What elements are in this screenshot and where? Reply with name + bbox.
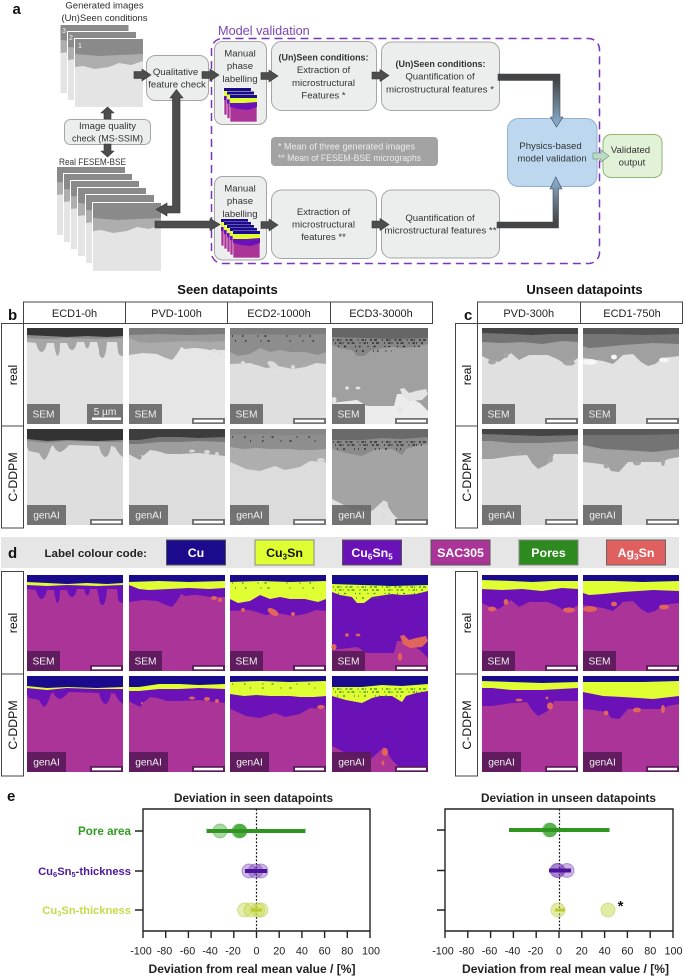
legend band: label colour code: Sn [287, 546, 303, 560]
row labels [456, 324, 478, 528]
box: validated output: Validated [611, 145, 650, 156]
legend band: label colour code: Sn [372, 546, 388, 560]
panel letter c: c [464, 307, 472, 324]
row labels left: real [6, 613, 20, 633]
image stack: generated images: 2 [69, 35, 73, 42]
x axis tick labels: -40 [202, 946, 218, 958]
label map: ECD3-3000h generated: genAI [338, 758, 365, 768]
box: physics-based model validation [508, 118, 597, 186]
micrograph: PVD-300h real: SEM [487, 410, 510, 420]
chart: deviation in seen datapoints [38, 793, 380, 976]
zero reference line [558, 809, 560, 931]
legend band: label colour code: Ag [618, 546, 634, 560]
column headers: PVD-100h [151, 308, 202, 320]
box: manual phase labelling bottom: Manual [224, 184, 256, 195]
label map: ECD2-1000h real [230, 575, 326, 671]
arrow: manual to extraction top [261, 70, 278, 82]
label map: PVD-100h real [129, 575, 225, 671]
legend band: label colour code: Cu [188, 546, 204, 560]
series: Cu3Sn thickness [551, 903, 615, 917]
row labels: C-DDPM [460, 452, 474, 502]
label map: PVD-100h generated [129, 676, 225, 772]
series: Cu6Sn5 thickness [549, 864, 574, 878]
micrograph: ECD1-750h real [583, 328, 679, 424]
micrograph: PVD-100h real: SEM [134, 410, 157, 420]
column headers: ECD1-750h [603, 308, 661, 320]
box: quantification bottom: microstructural features ** [384, 226, 497, 236]
legend band: label colour code: Cu [351, 546, 368, 560]
x axis tick labels: 80 [341, 946, 353, 958]
box: manual phase labelling top: Manual [224, 48, 256, 60]
micrograph: ECD1-750h real: SEM [588, 410, 611, 420]
label map: ECD1-750h generated [583, 676, 679, 772]
x axis tick labels: 20 [576, 946, 588, 958]
box: manual phase labelling top: phase [227, 61, 253, 72]
box: image quality check [64, 120, 150, 144]
legend band: label colour code: 6 [368, 552, 373, 562]
label map: ECD3-3000h real: SEM [337, 656, 360, 668]
heading: generated images: (Un)Seen conditions [61, 13, 148, 24]
x axis tick labels: -40 [505, 946, 520, 958]
label map: PVD-300h generated: genAI [488, 758, 515, 768]
x axis tick labels: 60 [319, 946, 331, 958]
plot frame and ticks [437, 809, 673, 938]
legend band: label colour code: SAC305 [437, 546, 484, 560]
x axis tick labels: -60 [482, 946, 497, 958]
row labels: C-DDPM [6, 452, 20, 502]
panel letter b: b [8, 307, 17, 324]
box: extraction bottom [272, 190, 376, 258]
zero reference line [256, 809, 258, 931]
column headers [24, 302, 432, 324]
column headers: ECD3-3000h [349, 308, 413, 320]
box: extraction top: Features * [301, 90, 346, 102]
x axis tick labels: -80 [459, 946, 474, 958]
micrograph: PVD-300h real [482, 328, 578, 424]
box: quantification top: microstructural features * [386, 84, 494, 95]
note: mean definitions [271, 137, 438, 166]
micrograph: PVD-100h generated: genAI [135, 510, 162, 522]
box: quantification top: (Un)Seen conditions: [396, 59, 486, 70]
micrograph: ECD2-1000h real: SEM [235, 410, 258, 420]
box: validated output: output [619, 158, 646, 168]
row labels [2, 324, 24, 528]
micrograph: ECD1-750h generated [583, 429, 679, 525]
x axis tick labels: -100 [130, 946, 152, 958]
x axis tick labels: -20 [528, 946, 543, 958]
note: mean definitions: * Mean of three generated images [278, 141, 415, 151]
legend band: label colour code: Sn [639, 546, 654, 560]
box: extraction top: (Un)Seen conditions: [278, 52, 368, 64]
label map: ECD3-3000h generated [332, 676, 428, 772]
series: Cu3Sn thickness [238, 903, 268, 917]
note: mean definitions: ** Mean of FESEM-BSE micrographs [278, 153, 421, 163]
arrow: extraction to quantification top [372, 70, 389, 82]
x axis tick labels: 40 [296, 946, 308, 958]
column headers: ECD1-0h [52, 308, 97, 320]
micrograph: ECD3-3000h real: SEM [337, 410, 360, 420]
x axis tick labels: 80 [644, 946, 656, 958]
x axis tick labels: -100 [432, 946, 454, 958]
x axis title: Deviation from real mean value / [%] [462, 964, 669, 976]
chart: deviation in unseen datapoints [432, 793, 683, 976]
column headers: ECD2-1000h [247, 308, 311, 320]
box: quantification top: Quantification of [405, 72, 475, 83]
label map: PVD-100h generated: genAI [135, 758, 162, 768]
row label: Cu3Sn thickness: 3 [57, 909, 61, 918]
micrograph: ECD1-750h generated: genAI [589, 510, 616, 522]
box: image quality check: check (MS-SSIM) [72, 134, 143, 144]
arrow: generated to qualitative [134, 69, 151, 81]
label map: ECD1-0h real: SEM [32, 656, 55, 668]
row label: pore area: Pore area [78, 826, 132, 838]
x axis tick labels: 20 [273, 946, 285, 958]
arrow: to validated output [593, 150, 609, 162]
micrograph: PVD-300h generated [482, 429, 578, 525]
box: physics-based model validation: Physics-based [519, 141, 582, 152]
row labels right: C-DDPM [460, 700, 474, 750]
box: quantification top [382, 42, 500, 110]
x axis tick labels: 100 [664, 946, 683, 958]
label map: ECD1-750h real: SEM [588, 656, 611, 668]
arrow: manual to extraction bottom [261, 219, 278, 231]
box: qualitative feature check: feature check [148, 80, 206, 90]
row labels right: real [460, 613, 474, 633]
legend band: label colour code: d [8, 545, 17, 562]
panel b: seen datapoints micrographs [2, 282, 432, 528]
micrograph: ECD3-3000h generated: genAI [338, 510, 365, 522]
box: extraction bottom: Extraction of [297, 207, 350, 218]
panel letter a: a [12, 1, 22, 18]
row label: Cu6Sn5 thickness: Sn [57, 866, 72, 878]
x axis tick labels: -80 [157, 946, 172, 958]
x axis tick labels: 60 [621, 946, 633, 958]
box: quantification bottom [382, 190, 500, 258]
panel: model validation frame [212, 38, 600, 264]
row label: Cu3Sn thickness: Sn-thickness [61, 905, 131, 917]
box: manual phase labelling top [214, 42, 266, 124]
image stack: real FESEM-BSE [57, 167, 162, 272]
label map: ECD1-0h generated: genAI [33, 758, 60, 768]
legend band: label colour code: 3 [634, 552, 639, 562]
legend band: label colour code: Pores [531, 546, 566, 560]
box: extraction bottom: microstructural [292, 220, 355, 230]
x axis tick labels: 100 [362, 946, 380, 958]
x axis tick labels [432, 946, 683, 958]
series: pore area [206, 824, 306, 838]
heading: unseen datapoints: Unseen datapoints [526, 282, 643, 297]
box: manual phase labelling bottom: labelling [222, 209, 258, 220]
panel c: unseen datapoints micrographs [456, 282, 682, 528]
row label: Cu3Sn thickness: Cu [42, 905, 57, 917]
label map: PVD-300h generated [482, 676, 578, 772]
panel letter e: e [7, 788, 15, 805]
box: extraction top: microstructural [292, 78, 355, 89]
box: manual phase labelling top: labelling [222, 74, 258, 85]
row labels right [456, 572, 478, 776]
micrograph: ECD3-3000h generated [332, 429, 428, 525]
micrograph: ECD1-0h real [27, 328, 123, 424]
double arrow: real images to qualitative check [156, 90, 183, 216]
row labels: real [460, 365, 474, 385]
box: validated output [603, 134, 662, 178]
chart title: Deviation in seen datapoints [174, 793, 333, 805]
chart title: Deviation in unseen datapoints [481, 793, 656, 805]
double arrow: quality check up [101, 107, 114, 119]
micrograph: ECD3-3000h real [331, 328, 428, 424]
micrograph: ECD1-0h real: 5 µm [94, 407, 116, 418]
arrow: top branch into physics model [498, 74, 563, 127]
box: qualitative feature check: Qualitative [153, 67, 198, 78]
x axis tick labels: 0 [556, 946, 562, 958]
box: qualitative feature check [146, 56, 208, 100]
label map: PVD-300h real: SEM [487, 656, 510, 668]
heading: model validation: Model validation [218, 24, 310, 38]
arrow: real images to manual labelling [155, 218, 220, 230]
arrow: qualitative to manual labelling [202, 69, 219, 81]
heading: seen datapoints: Seen datapoints [177, 282, 278, 297]
series: pore area [509, 823, 610, 837]
micrograph: PVD-300h generated: genAI [488, 510, 515, 522]
box: quantification bottom: Quantification of [405, 213, 475, 224]
label map: ECD1-0h generated [27, 676, 123, 772]
legend band: label colour code: 3 [283, 552, 288, 562]
micrograph: ECD2-1000h generated [230, 429, 326, 525]
label map: PVD-100h real: SEM [134, 656, 157, 668]
box: manual phase labelling bottom [214, 176, 266, 260]
arrow: extraction to quantification bottom [372, 218, 389, 230]
row label: Cu6Sn5 thickness: Cu [38, 866, 53, 878]
box: image quality check: Image quality [79, 121, 136, 132]
label map: ECD2-1000h real: SEM [235, 656, 258, 668]
box: manual phase labelling bottom: phase [227, 196, 253, 207]
label map: ECD1-0h real [27, 575, 123, 671]
row labels left [2, 572, 24, 776]
micrograph: PVD-100h generated [129, 429, 225, 525]
micrograph: ECD1-0h generated: genAI [33, 510, 60, 522]
label map: ECD1-750h real [583, 575, 679, 671]
label: real FESEM-BSE: Real FESEM-BSE [59, 157, 126, 168]
micrograph: ECD2-1000h real [230, 328, 326, 424]
panel d: segmentation label maps [1, 537, 679, 776]
label map: ECD2-1000h generated: genAI [236, 758, 263, 768]
micrograph: ECD1-0h generated [27, 429, 123, 525]
micrograph: ECD1-0h real: SEM [32, 410, 55, 420]
label map: PVD-300h real [482, 575, 578, 671]
double arrow: quality check down [101, 144, 114, 157]
row labels: real [6, 365, 20, 385]
column headers: PVD-300h [503, 308, 554, 320]
image stack: generated images: 1 [78, 43, 82, 50]
legend band: label colour code: Label colour code: [44, 548, 147, 560]
column headers [478, 302, 682, 324]
legend band: label colour code [1, 537, 679, 568]
box: extraction top: Extraction of [297, 65, 350, 76]
row label: Cu6Sn5 thickness: 6 [53, 870, 57, 879]
x axis tick labels: -20 [225, 946, 241, 958]
label map: ECD1-750h generated: genAI [589, 758, 616, 768]
row label: Cu6Sn5 thickness: 5 [71, 870, 76, 879]
label map: ECD2-1000h generated [230, 676, 326, 772]
row labels left: C-DDPM [6, 700, 20, 750]
box: extraction bottom: features ** [301, 232, 346, 243]
row label: Cu6Sn5 thickness: -thickness [76, 866, 131, 878]
x axis tick labels: 0 [253, 946, 260, 958]
asterisk: outlier marker: * [618, 898, 624, 915]
x axis tick labels [130, 946, 380, 958]
arrow: bottom branch into physics model [497, 177, 562, 228]
panel e: deviation charts [7, 788, 683, 976]
panel a: workflow diagram [12, 0, 662, 272]
box: extraction top [272, 42, 376, 110]
legend band: label colour code: 5 [388, 552, 393, 562]
label map: ECD3-3000h real [331, 575, 428, 671]
image stack: generated images [60, 25, 144, 109]
x axis title: Deviation from real mean value / [%] [148, 964, 356, 976]
micrograph: PVD-100h real [129, 328, 225, 424]
series: Cu6Sn5 thickness [242, 864, 268, 878]
box: physics-based model validation: model validation [517, 154, 587, 164]
image stack: generated images: 3 [62, 28, 66, 35]
legend band: label colour code: Cu [266, 546, 283, 560]
micrograph: ECD2-1000h generated: genAI [236, 510, 263, 522]
plot frame and ticks [135, 809, 370, 938]
heading: generated images: Generated images [65, 0, 144, 12]
x axis tick labels: -60 [180, 946, 195, 958]
x axis tick labels: 40 [599, 946, 611, 958]
